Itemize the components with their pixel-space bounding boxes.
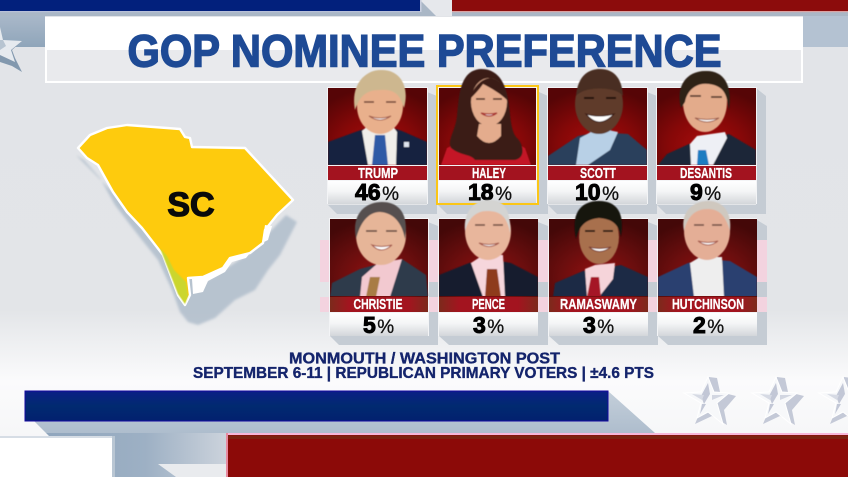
title panel xyxy=(45,17,803,83)
title: GOP NOMINEE PREFERENCE xyxy=(128,25,722,76)
card shadows row 1 xyxy=(328,88,766,214)
bottom shade shapes xyxy=(34,391,655,477)
icon: star 2 xyxy=(752,377,804,425)
map: South Carolina xyxy=(76,125,297,325)
red bar xyxy=(226,433,848,477)
card: Christie 5%: 5% xyxy=(363,312,394,338)
blue bar xyxy=(25,391,608,421)
top banner bars xyxy=(0,0,848,16)
card: Pence 3%: 3% xyxy=(473,312,504,338)
card: Hutchinson 2% xyxy=(657,201,757,338)
source note xyxy=(193,350,654,382)
card: DeSantis 9%: DESANTIS xyxy=(680,166,732,182)
card: Christie 5% xyxy=(329,202,429,338)
card: Haley 18% (highlighted) xyxy=(437,69,538,205)
card: Scott 10%: SCOTT xyxy=(580,166,616,182)
pink compression bands xyxy=(320,240,767,312)
card: Hutchinson 2%: 2% xyxy=(693,312,724,338)
card: Haley 18% (highlighted): 18% xyxy=(468,179,512,205)
icon: star 3 xyxy=(819,377,848,425)
card: Scott 10%: 10% xyxy=(575,179,619,205)
card shadows row 2 xyxy=(330,220,767,345)
card: Ramaswamy 3% xyxy=(548,201,648,338)
card: DeSantis 9%: 9% xyxy=(690,179,721,205)
card: Christie 5%: CHRISTIE xyxy=(354,297,403,313)
card: Haley 18% (highlighted): HALEY xyxy=(472,166,506,182)
card: Trump 46%: TRUMP xyxy=(358,166,398,182)
source note: SEPTEMBER 6-11 | REPUBLICAN PRIMARY VOTERS | ±4.6 PTS xyxy=(193,365,654,382)
card: Pence 3% xyxy=(438,200,538,338)
source note: MONMOUTH / WASHINGTON POST xyxy=(289,350,561,368)
card: Ramaswamy 3%: 3% xyxy=(583,312,614,338)
card: Trump 46%: 46% xyxy=(355,179,399,205)
card: Ramaswamy 3%: RAMASWAMY xyxy=(560,297,637,313)
card: Scott 10% xyxy=(547,69,648,205)
side shade bands xyxy=(0,16,848,47)
card: Trump 46% xyxy=(327,70,428,205)
icon: star top left xyxy=(0,27,22,72)
card: Pence 3%: PENCE xyxy=(472,297,505,313)
white box bottom left xyxy=(0,436,115,477)
label: SC: SC xyxy=(167,186,215,224)
icon: star 1 xyxy=(684,377,736,425)
card: DeSantis 9% xyxy=(656,71,757,205)
card: Hutchinson 2%: HUTCHINSON xyxy=(672,297,744,313)
